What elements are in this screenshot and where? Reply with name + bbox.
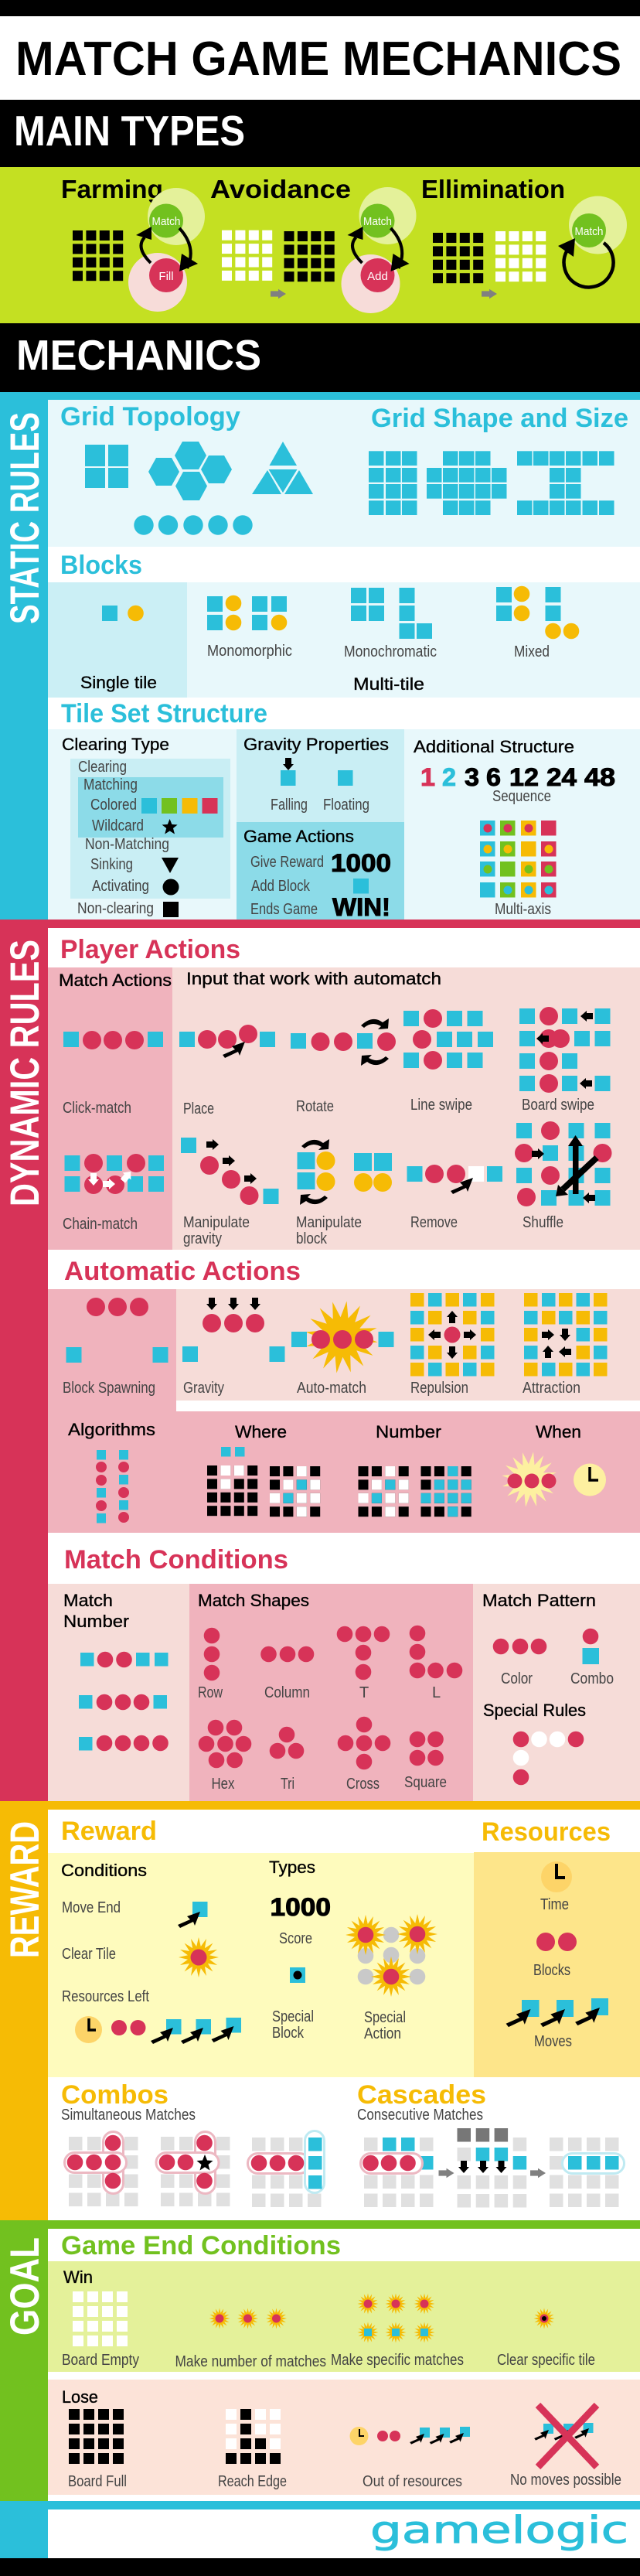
match shapes: Column: [264, 1684, 310, 1701]
manipulate block: [296, 1139, 392, 1247]
lose panel: [48, 2380, 640, 2495]
repulsion: Repulsion: [410, 1380, 468, 1397]
win panel: Make specific matches: [331, 2352, 464, 2369]
single tile: Single tile: [80, 673, 157, 692]
multi-tile label: Multi-tile: [353, 674, 424, 694]
multi-axis grid: [480, 821, 557, 897]
game actions: 1000: [331, 849, 391, 877]
game actions: Add Block: [251, 878, 311, 895]
monomorphic: Monomorphic: [207, 643, 292, 660]
clearing type: Matching: [83, 776, 138, 793]
additional structure: Multi-axis: [495, 901, 551, 918]
match number: [63, 1591, 169, 1751]
types: Block: [272, 2025, 305, 2042]
additional structure: Additional Structure: [414, 737, 574, 756]
win panel: Board Empty: [62, 2352, 139, 2369]
resources: [506, 1861, 608, 2050]
gravity properties: [237, 729, 404, 822]
resources heading: Resources: [482, 1817, 611, 1847]
win panel: Win: [63, 2267, 93, 2287]
blocks heading: Blocks: [60, 551, 142, 580]
where: Where: [235, 1422, 287, 1442]
static rules label: STATIC RULES: [2, 412, 48, 624]
gravity properties: Gravity Properties: [243, 735, 389, 754]
avoidance: Add: [367, 270, 388, 283]
clearing type: Wildcard: [92, 817, 144, 834]
player actions heading: Player Actions: [60, 935, 240, 964]
automatic actions heading: Automatic Actions: [64, 1257, 301, 1286]
when: [498, 1422, 606, 1511]
auto-match: Auto-match: [297, 1380, 366, 1397]
additional structure: 2: [442, 763, 456, 791]
cascades: Cascades: [357, 2080, 486, 2110]
additional structure: 1: [420, 763, 435, 791]
lose panel: Out of resources: [363, 2473, 462, 2490]
game actions: WIN!: [332, 893, 390, 921]
game actions: [237, 822, 404, 921]
panel: static rules: [0, 392, 640, 921]
rotate: Rotate: [296, 1098, 334, 1115]
place: [179, 1025, 275, 1117]
input heading: Input that work with automatch: [186, 969, 441, 988]
match shapes: Row: [198, 1684, 223, 1701]
game end heading: Game End Conditions: [61, 2231, 341, 2260]
farming: Fill: [158, 270, 174, 283]
game actions: Game Actions: [243, 827, 354, 846]
match shapes: Match Shapes: [198, 1591, 309, 1610]
combos: [61, 2080, 325, 2207]
combos: Combos: [61, 2080, 169, 2110]
types: Special: [272, 2008, 314, 2025]
lose panel: No moves possible: [510, 2472, 621, 2489]
cascades: Consecutive Matches: [357, 2107, 483, 2124]
avoidance: Match: [363, 215, 392, 228]
avoidance: Avoidance: [210, 175, 351, 203]
algorithms: Algorithms: [68, 1420, 155, 1439]
farming: Match: [151, 215, 181, 228]
grid shape heading: Grid Shape and Size: [371, 404, 628, 433]
clearing type: [62, 735, 230, 917]
mixed: [496, 586, 579, 660]
chain-match: [63, 1154, 164, 1233]
place: Place: [183, 1100, 214, 1117]
additional structure: 3: [465, 763, 479, 791]
footer: [0, 2501, 640, 2576]
top black bar: [0, 0, 640, 16]
farming: [61, 175, 205, 312]
game actions: Ends Game: [250, 901, 318, 918]
grid topology heading: Grid Topology: [60, 402, 240, 432]
types: Types: [269, 1858, 315, 1877]
reward heading: Reward: [61, 1817, 157, 1846]
manipulate gravity: [181, 1138, 278, 1247]
single tile: [80, 606, 157, 692]
algorithms: [68, 1420, 155, 1523]
mechanics header: [0, 323, 640, 392]
conditions: Conditions: [61, 1861, 147, 1880]
grid shapes: [369, 451, 614, 515]
manipulate block: block: [296, 1230, 328, 1247]
clearing type: Clearing: [78, 759, 127, 776]
resources: Blocks: [533, 1962, 570, 1979]
clearing type: Non-Matching: [85, 836, 169, 853]
mechanics header: MECHANICS: [16, 331, 261, 379]
monochromatic: Monochromatic: [344, 643, 437, 660]
special rules: [483, 1701, 586, 1785]
match shapes: Tri: [281, 1776, 294, 1793]
click-match: Click-match: [63, 1100, 131, 1117]
rotate: [291, 1018, 396, 1115]
match shapes: [198, 1591, 462, 1793]
additional structure: [414, 737, 615, 918]
board swipe: Board swipe: [522, 1097, 594, 1114]
match shapes: Cross: [346, 1776, 380, 1793]
where: [207, 1422, 320, 1517]
win panel: Make number of matches: [175, 2353, 326, 2370]
types: 1000: [271, 1893, 331, 1921]
panel: goal: [0, 2220, 640, 2501]
types: Special: [364, 2009, 406, 2026]
match pattern: Color: [501, 1670, 533, 1687]
block spawning: [63, 1298, 169, 1397]
combos: Simultaneous Matches: [61, 2107, 196, 2124]
repulsion: [410, 1293, 495, 1397]
match shapes: L: [432, 1684, 441, 1701]
resources: Moves: [534, 2033, 572, 2050]
chain-match: Chain-match: [63, 1216, 138, 1233]
additional structure: Sequence: [492, 788, 551, 805]
ellimination: [421, 175, 627, 299]
conditions: Move End: [62, 1899, 121, 1916]
additional structure: 24: [546, 763, 577, 791]
match pattern: Combo: [570, 1670, 614, 1687]
gravity: Gravity: [183, 1380, 224, 1397]
shuffle: [515, 1121, 612, 1231]
main types header: MAIN TYPES: [14, 107, 245, 155]
monochromatic: [344, 588, 437, 660]
number: [359, 1422, 471, 1517]
manipulate gravity: gravity: [183, 1230, 222, 1247]
additional structure: 12: [509, 763, 539, 791]
match actions heading: Match Actions: [59, 971, 172, 990]
click-match: [63, 1031, 163, 1117]
additional structure: 6: [486, 763, 501, 791]
panel: reward: [0, 1801, 640, 2220]
win panel: [48, 2261, 640, 2372]
clearing type: Clearing Type: [62, 735, 169, 754]
gravity properties: Falling: [271, 797, 308, 814]
panel: dynamic rules: [0, 920, 640, 1801]
panel: main types: [0, 167, 640, 323]
game actions: Give Reward: [250, 854, 324, 871]
clearing type: Activating: [92, 878, 149, 895]
match number: Match: [63, 1591, 113, 1610]
types: Action: [364, 2025, 401, 2042]
board swipe: [519, 1007, 611, 1114]
match pattern: Match Pattern: [482, 1591, 596, 1610]
dynamic rules label: DYNAMIC RULES: [2, 940, 48, 1206]
clearing type: Non-clearing: [77, 900, 154, 917]
block spawning: Block Spawning: [63, 1380, 155, 1397]
auto-match: [291, 1296, 394, 1397]
match shapes: Hex: [212, 1776, 235, 1793]
monomorphic: [207, 595, 292, 660]
lose panel: Board Full: [68, 2473, 127, 2490]
manipulate block: Manipulate: [296, 1214, 362, 1231]
match shapes: Square: [404, 1774, 447, 1791]
attraction: [523, 1293, 608, 1397]
lose panel: Reach Edge: [218, 2473, 287, 2490]
match pattern: [482, 1591, 614, 1687]
ellimination: Ellimination: [421, 175, 565, 203]
ellimination: Match: [575, 225, 603, 238]
grid topology shapes: [85, 442, 313, 535]
resources: Time: [540, 1896, 569, 1913]
farming: Farming: [61, 175, 163, 203]
avoidance: [210, 175, 416, 313]
clearing type: Colored: [90, 797, 137, 814]
shuffle: Shuffle: [523, 1214, 563, 1231]
additional structure: 48: [584, 763, 615, 791]
mixed: Mixed: [514, 643, 550, 660]
conditions: Resources Left: [62, 1988, 149, 2005]
number: Number: [376, 1422, 441, 1442]
manipulate gravity: Manipulate: [183, 1214, 250, 1231]
match shapes: T: [359, 1684, 369, 1701]
remove: [407, 1165, 502, 1231]
clearing type: Sinking: [90, 856, 133, 873]
main types header: [0, 100, 640, 167]
match conditions heading: Match Conditions: [64, 1545, 288, 1575]
special rules: Special Rules: [483, 1701, 586, 1720]
match number: Number: [63, 1612, 129, 1631]
when: When: [536, 1422, 581, 1442]
reward label: REWARD: [2, 1821, 48, 1958]
line swipe: Line swipe: [410, 1097, 472, 1114]
types: [269, 1858, 437, 2042]
line swipe: [403, 1009, 493, 1114]
cascades: [357, 2080, 625, 2207]
gravity: [182, 1298, 284, 1397]
title: MATCH GAME MECHANICS: [15, 32, 621, 86]
win panel: Clear specific tile: [497, 2352, 595, 2369]
remove: Remove: [410, 1214, 458, 1231]
conditions: [61, 1861, 241, 2044]
goal label: GOAL: [2, 2237, 48, 2335]
conditions: Clear Tile: [62, 1946, 116, 1963]
attraction: Attraction: [523, 1380, 580, 1397]
lose panel: Lose: [62, 2387, 98, 2407]
types: Score: [279, 1930, 312, 1947]
logo: gamelogic: gamelogic: [370, 2509, 628, 2552]
tile set structure heading: Tile Set Structure: [61, 699, 267, 728]
gravity properties: Floating: [323, 797, 369, 814]
